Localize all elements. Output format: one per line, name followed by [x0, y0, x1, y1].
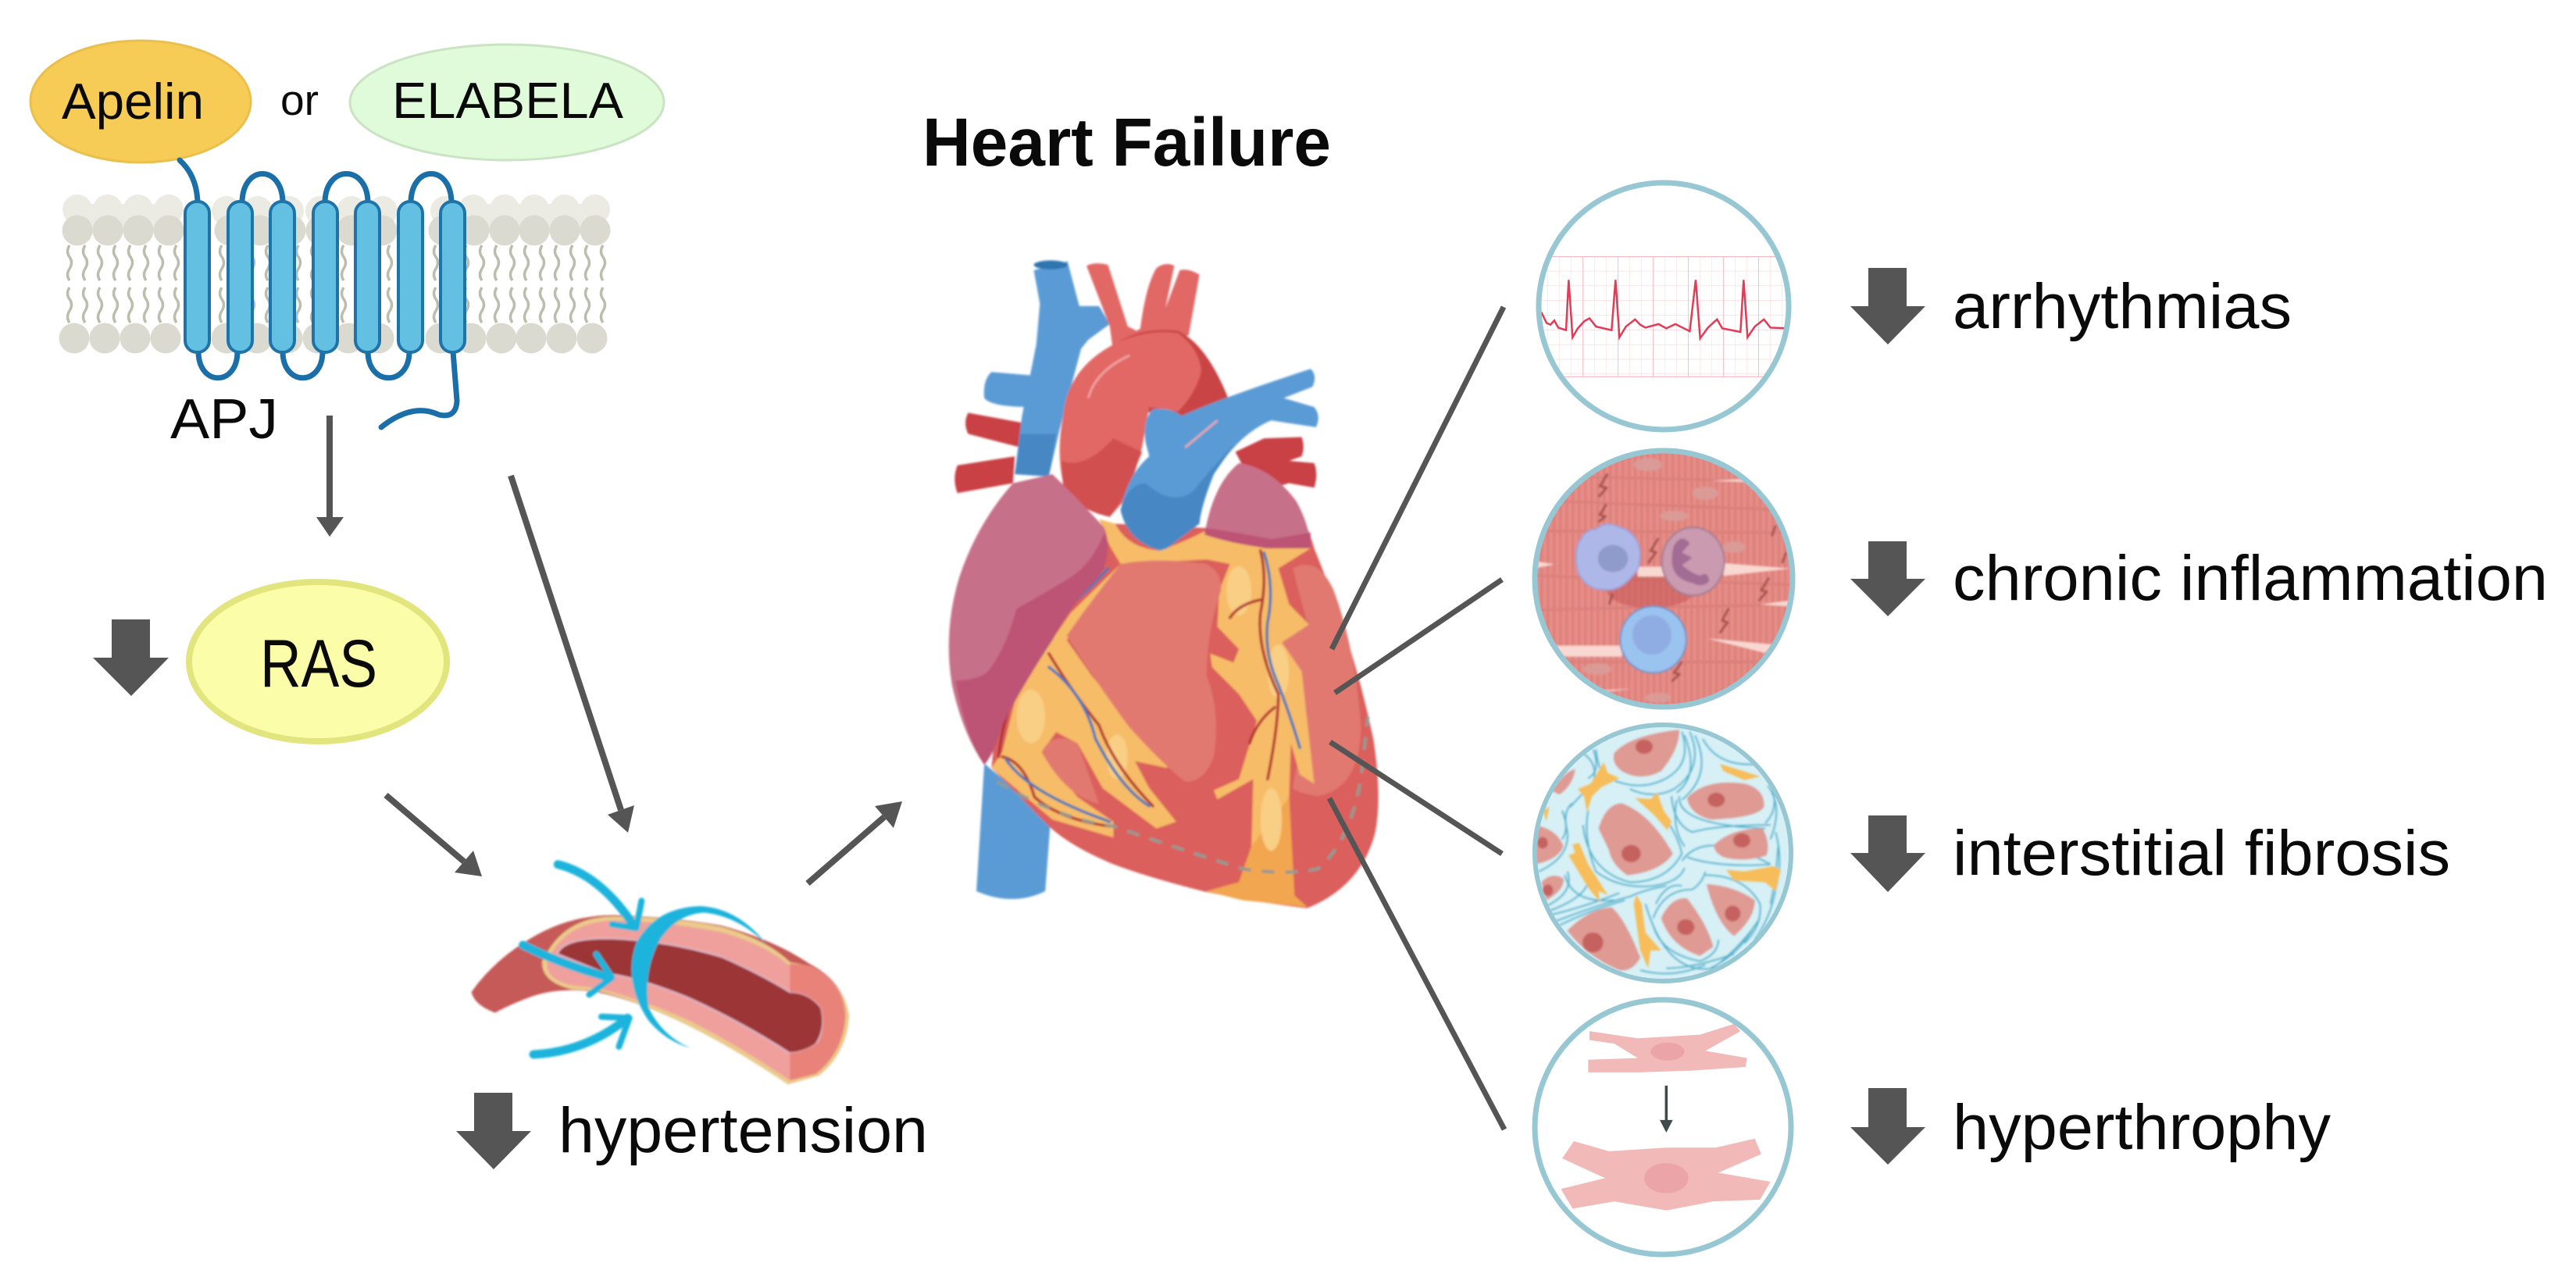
- left atrium shadow: [1205, 528, 1311, 548]
- aortic branches: [1086, 263, 1200, 353]
- vessel wall: [547, 920, 790, 1080]
- callout line: chronic inflammation: [1335, 580, 1502, 693]
- heart body: [991, 497, 1379, 908]
- arrow: vessel to heart: [808, 801, 902, 883]
- lateral ventricle highlight: [1279, 565, 1361, 796]
- vessel rim: [542, 916, 849, 1084]
- arrow: RAS to vessel: [386, 795, 482, 876]
- pulmonary veins: [954, 413, 1316, 493]
- cyan swirl: [632, 906, 767, 1048]
- small cell nucleus: [1650, 1043, 1685, 1061]
- block arrow: decreased chronic inflammation: [1850, 541, 1925, 616]
- collagen fibres: [1539, 732, 1779, 973]
- circle: chronic inflammation: [1532, 448, 1795, 709]
- superior vena cava: [1015, 262, 1110, 476]
- coronary fat light blotches: [1017, 566, 1289, 851]
- arrow: APJ to RAS: [316, 416, 344, 537]
- ECG grid: [1536, 257, 1796, 376]
- central ventricle highlight: [1067, 561, 1221, 782]
- heart illustration: [949, 260, 1379, 908]
- fibre boundaries: [1533, 477, 1791, 662]
- arrow: APJ to vessel: [511, 476, 634, 833]
- RAS ellipse: RAS: [260, 626, 377, 701]
- label: arrhythmias: arrhythmias: [1953, 271, 2292, 342]
- muscle fibres: [1537, 453, 1790, 705]
- cyan compression arrows: [523, 865, 641, 1054]
- RAS ellipse: [189, 582, 447, 741]
- ECG trace: [1541, 280, 1787, 338]
- fibroblasts: [1543, 762, 1781, 969]
- ligand: Apelin: Apelin: [62, 73, 204, 130]
- right atrium shadow: [955, 533, 1108, 765]
- right atrium: [949, 474, 1108, 765]
- zigzag intercalated discs: [1599, 473, 1786, 682]
- label: interstitial fibrosis: interstitial fibrosis: [1953, 818, 2450, 889]
- cardiomyocytes: [1533, 730, 1768, 970]
- coronary arteries and veins: [999, 551, 1300, 826]
- lymphocyte: [1620, 606, 1686, 673]
- circle: interstitial fibrosis: [1533, 725, 1791, 981]
- aorta shadow: [1061, 438, 1142, 517]
- ligand: ELABELA: [350, 45, 664, 160]
- icon: blood vessel with vasodilation arrows: [472, 865, 849, 1084]
- vessel lumen: [558, 939, 823, 1053]
- vena cava opening: [1034, 260, 1068, 269]
- block arrow: decreased RAS: [93, 619, 169, 696]
- large cell nucleus: [1644, 1163, 1689, 1194]
- circle: hypertrophy: [1535, 1000, 1791, 1254]
- block arrow: decreased hypertension: [456, 1093, 531, 1169]
- pulmonary artery shadow: [1121, 443, 1236, 551]
- coronary fat shadow: [1207, 797, 1307, 907]
- circle: ECG arrhythmia: [1536, 183, 1796, 430]
- callout line: hypertrophy: [1329, 798, 1504, 1129]
- aorta: [1060, 332, 1201, 517]
- receptor helices: [185, 202, 465, 352]
- neutrophil: [1662, 527, 1725, 595]
- membrane back row heads: [62, 194, 610, 234]
- block arrow: decreased interstitial fibrosis: [1850, 815, 1925, 892]
- aorta highlight: [1088, 355, 1218, 448]
- ligand: ELABELA: ELABELA: [392, 72, 624, 129]
- coronary fat: upper and anterior: [1099, 519, 1315, 907]
- cell membrane with APJ receptor: [59, 160, 611, 427]
- pulmonary artery: [1121, 369, 1318, 551]
- membrane lipids: [59, 216, 611, 353]
- label: APJ: APJ: [170, 388, 278, 451]
- label: chronic inflammation: chronic inflammation: [1953, 543, 2548, 614]
- inflamed shade: [1607, 573, 1695, 608]
- hypertrophied cardiomyocyte: [1561, 1139, 1771, 1211]
- vessel cross section: [790, 963, 846, 1080]
- block arrow: decreased arrhythmias: [1850, 268, 1925, 344]
- pale smudges: [1583, 459, 1746, 703]
- aortic arch shadow: [1110, 330, 1228, 420]
- ligand: Apelin: [30, 41, 251, 162]
- small cardiomyocyte: [1588, 1024, 1747, 1072]
- coronary fat: lower left: [991, 564, 1176, 837]
- label: hyperthrophy: hyperthrophy: [1953, 1092, 2331, 1163]
- receptor loops and termini: [180, 160, 457, 427]
- vena cava shadow: [1015, 434, 1056, 476]
- lower left ventricle highlight: [1042, 738, 1099, 804]
- callout line: interstitial fibrosis: [1330, 742, 1502, 854]
- left atrium: [1205, 463, 1311, 546]
- callout line: arrhythmias: [1332, 307, 1504, 649]
- pale fibre gaps: [1536, 479, 1790, 692]
- dashed septum line: [997, 716, 1368, 872]
- arrow small to large: [1660, 1086, 1673, 1133]
- label: hypertension: hypertension: [558, 1095, 928, 1166]
- inferior vena cava: [976, 763, 1051, 899]
- nuclei: [1537, 740, 1750, 953]
- monocyte: [1576, 524, 1640, 590]
- block arrow: decreased hypertrophy: [1850, 1088, 1925, 1165]
- text: or: or: [280, 76, 319, 124]
- vessel outer wall: [472, 915, 849, 1084]
- title: Heart Failure: [922, 105, 1331, 180]
- vena cava side branch: [984, 372, 1034, 407]
